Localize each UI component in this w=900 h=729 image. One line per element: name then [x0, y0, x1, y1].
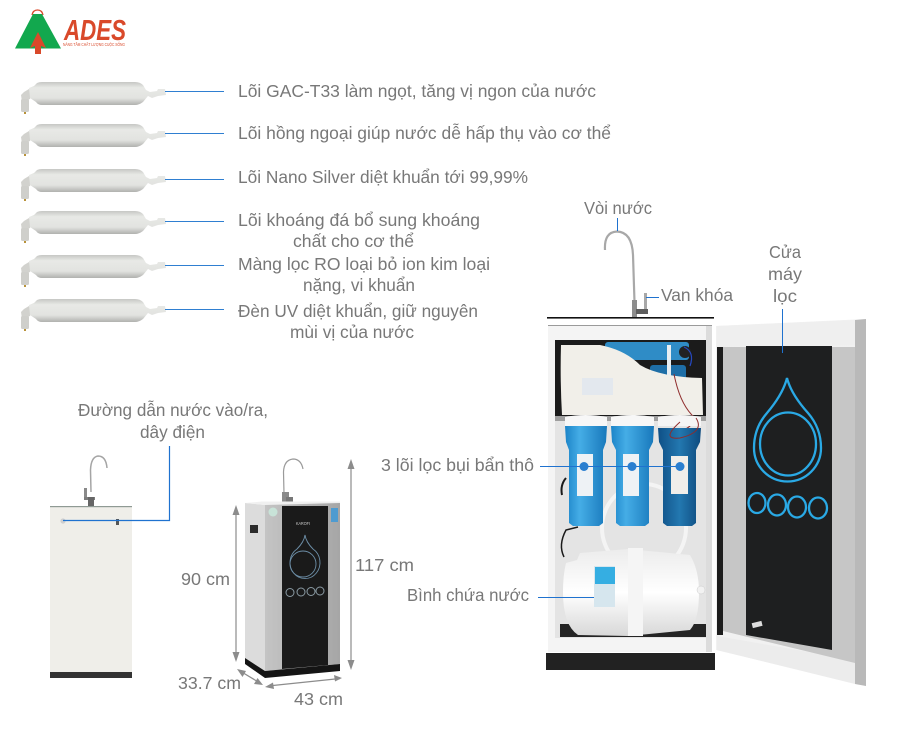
filter 6: UV [21, 299, 478, 342]
logo: ADES [63, 15, 127, 47]
callout: 3 coarse filters: 3 lõi lọc bụi bẩn thô [381, 455, 534, 475]
pressure tank [563, 548, 705, 636]
filter 1: GAC-T33 [21, 81, 596, 114]
dimension arrows [232, 459, 354, 689]
filter 3: Nano Silver [21, 167, 528, 201]
callout: door [768, 242, 802, 353]
filter 2: hồng ngoại [21, 122, 611, 156]
callout: faucet: Vòi nước [584, 198, 652, 218]
callout: 3 coarse filters [381, 455, 684, 475]
filter 6: UV: Đèn UV diệt khuẩn, giữ nguyên [238, 301, 478, 321]
open cabinet [546, 317, 715, 670]
dimension labels: 33.7 cm [178, 673, 241, 693]
3 filter housings [565, 415, 701, 526]
filter 5: RO [21, 254, 490, 295]
filter 4: khoáng đá [21, 210, 480, 251]
callout: door: máy [768, 264, 802, 284]
filter 4: khoáng đá: chất cho cơ thể [293, 231, 414, 251]
dimension labels: 117 cm [355, 555, 414, 575]
callout: faucet [584, 198, 652, 231]
filter 5: RO: nặng, vi khuẩn [303, 275, 415, 295]
faucet [605, 232, 648, 317]
back view machine [50, 456, 132, 678]
label: water lines [63, 399, 268, 520]
filter 5: RO: Màng lọc RO loại bỏ ion kim loại [238, 254, 490, 274]
membrane assembly [561, 342, 703, 430]
filter 4: khoáng đá: Lõi khoáng đá bổ sung khoáng [238, 210, 480, 230]
open door [716, 319, 866, 686]
water drop emblem [748, 378, 827, 518]
dimension labels [178, 555, 414, 709]
callout: valve: Van khóa [661, 285, 733, 305]
front machine: KAROFI [296, 521, 310, 526]
callout: tank: Bình chứa nước [407, 585, 529, 605]
front machine [245, 459, 340, 678]
dimension labels: 43 cm [294, 689, 343, 709]
label: water lines: Đường dẫn nước vào/ra, [78, 399, 268, 420]
hoses [602, 484, 686, 572]
filter 6: UV: mùi vị của nước [290, 322, 414, 342]
callout: door: Cửa [769, 242, 801, 262]
logo [15, 10, 127, 54]
filter 3: Nano Silver: Lõi Nano Silver diệt khuẩn tới 99,99% [238, 167, 528, 187]
logo: NÂNG TẦM CHẤT LƯỢNG CUỘC SỐNG [63, 41, 125, 47]
filter 2: hồng ngoại: Lõi hồng ngoại giúp nước dễ hấp thụ vào cơ thể [238, 122, 611, 143]
callout: door: lọc [773, 286, 797, 306]
filter 1: GAC-T33: Lõi GAC-T33 làm ngọt, tăng vị ngon của nước [238, 81, 596, 101]
dimension labels: 90 cm [181, 569, 230, 589]
label: water lines: dây điện [140, 422, 205, 442]
